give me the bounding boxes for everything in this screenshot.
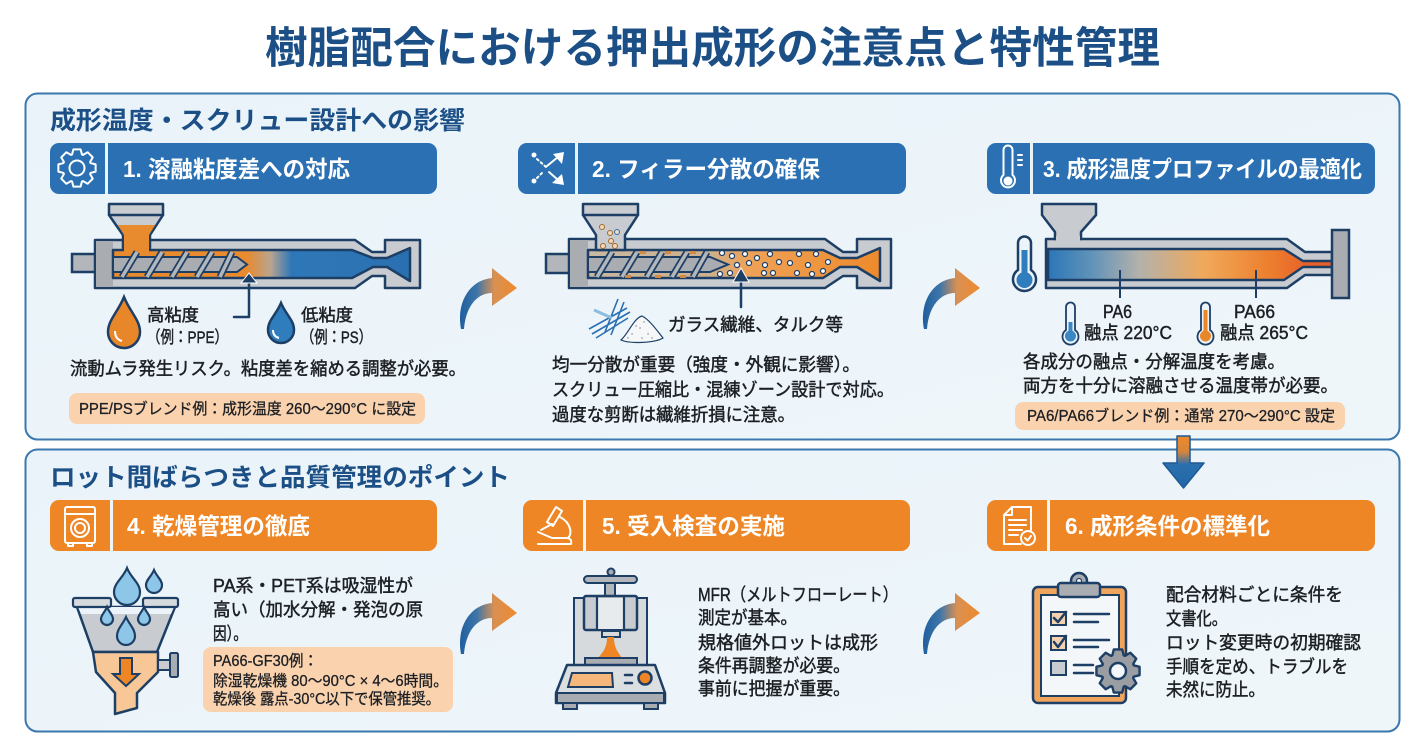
header: step 6: 6. 成形条件の標準化 [1065, 513, 1270, 539]
label: high viscosity: 高粘度 [147, 306, 199, 325]
text: step 6 description: 配合材料ごとに条件を [1166, 585, 1343, 605]
text: step 3 description [1023, 352, 1338, 396]
icon: large thermometer [1013, 237, 1036, 291]
label: PA6 melting point: PA6 [1103, 302, 1132, 322]
text: step 6 description: 手順を定め、トラブルを [1166, 656, 1348, 677]
text: step 3 description: 両方を十分に溶融させる温度帯が必要。 [1023, 376, 1338, 396]
text: step 2 description: 過度な剪断は繊維折損に注意。 [552, 405, 795, 425]
text: step 6 description: 文書化。 [1166, 609, 1227, 629]
callout: PA66-GF30 example: 乾燥後 露点-30°C以下で保管推奨。 [213, 690, 440, 708]
text: step 2 description: スクリュー圧縮比・混練ゾーン設計で対応。 [552, 380, 894, 400]
header: step 2 [518, 143, 906, 194]
diagram: extruder with filler [546, 204, 891, 288]
label: PA66 melting point: PA66 [1234, 302, 1275, 322]
label: high viscosity [147, 306, 228, 347]
arrow: step 1 to 2 [460, 268, 517, 329]
label: low viscosity: （例：PS） [301, 328, 372, 347]
text: step 2 description: 均一分散が重要（強度・外観に影響）。 [552, 355, 860, 375]
text: step 3 description: 各成分の融点・分解温度を考慮。 [1023, 352, 1285, 372]
label: PA66 melting point [1220, 302, 1308, 343]
header: step 5: 5. 受入検査の実施 [602, 513, 785, 539]
label: high viscosity: （例：PPE） [147, 328, 228, 347]
arrow: filler pointer [733, 268, 749, 307]
callout: PPE/PS example [69, 393, 425, 424]
heading: section 2: ロット間ばらつきと品質管理のポイント [50, 464, 510, 492]
arrow: step 2 to 3 [923, 268, 980, 329]
icon: clipboard and gear [1033, 573, 1140, 703]
icon: PA66 thermometer [1198, 302, 1214, 345]
diagram: barrel temperature profile [1042, 204, 1349, 298]
text: step 4 description: PA系・PET系は吸湿性が [213, 576, 413, 596]
arrow: section 1 to section 2 [1163, 436, 1204, 488]
text: step 6 description: ロット変更時の初期確認 [1166, 633, 1361, 653]
icon: glass fibers and talc [589, 299, 663, 342]
panel: lot variation and quality control [26, 450, 1400, 732]
text: step 5 description: MFR（メルトフローレート） [698, 585, 898, 605]
text: step 5 description: 条件再調整が必要。 [698, 656, 850, 676]
icon: MFR tester [556, 568, 665, 709]
text: step 4 description: 因）。 [213, 624, 247, 644]
header: step 6 [987, 500, 1375, 551]
text: step 5 description: 事前に把握が重要。 [698, 679, 850, 699]
callout: PA66-GF30 example [203, 647, 453, 712]
label: PA6 melting point [1084, 302, 1172, 343]
text: step 4 description: 高い（加水分解・発泡の原 [213, 600, 423, 620]
panel: molding temperature and screw design [26, 94, 1400, 440]
label: low viscosity: 低粘度 [301, 306, 353, 325]
arrow: step 4 to 5 [460, 593, 517, 654]
icon: PA6 thermometer [1062, 302, 1078, 345]
callout: PA6/PA66 example [1015, 402, 1345, 430]
icon: microscope [538, 507, 571, 544]
text: step 5 description: 測定が基本。 [698, 608, 797, 628]
header: step 3 [987, 143, 1375, 194]
icon: blue drop [268, 303, 294, 343]
label: filler types: ガラス繊維、タルク等 [668, 315, 843, 335]
icon: orange drop [108, 297, 140, 348]
header: step 2: 2. フィラー分散の確保 [592, 156, 820, 182]
icon: dryer [65, 507, 95, 546]
text: step 6 description [1166, 585, 1361, 700]
callout: PA66-GF30 example: 除湿乾燥機 80〜90°C × 4〜6時間。 [213, 672, 448, 690]
label: PA66 melting point: 融点 265°C [1220, 323, 1308, 343]
diagram: extruder with viscosity difference [72, 204, 420, 288]
text: step 5 description: 規格値外ロットは成形 [698, 633, 878, 653]
icon: dispersion arrows [532, 152, 564, 185]
text: step 1 description: 流動ムラ発生リスク。粘度差を縮める調整が必要。 [70, 359, 466, 379]
callout: PA66-GF30 example: PA66-GF30例： [213, 652, 318, 670]
icon: drying hopper [73, 568, 178, 714]
text: step 2 description [552, 355, 894, 425]
header: step 1: 1. 溶融粘度差への対応 [123, 156, 350, 182]
label: PA6 melting point: 融点 220°C [1084, 323, 1172, 343]
arrow: step 5 to 6 [923, 593, 980, 654]
heading: section 1: 成形温度・スクリュー設計への影響 [50, 107, 465, 135]
header: step 4 [50, 500, 437, 551]
header: step 4: 4. 乾燥管理の徹底 [127, 513, 310, 539]
icon: document check [1004, 507, 1035, 545]
title: 樹脂配合における押出成形の注意点と特性管理 [265, 25, 1160, 73]
callout: PA6/PA66 example: PA6/PA66ブレンド例：通常 270〜290°C 設定 [1027, 406, 1335, 425]
text: step 6 description: 未然に防止。 [1166, 680, 1265, 700]
callout: PPE/PS example: PPE/PSブレンド例：成形温度 260〜290°C に設定 [79, 399, 416, 418]
icon: gear [58, 149, 96, 187]
arrow: viscosity pointer [234, 273, 257, 317]
text: step 5 description [698, 585, 898, 699]
header: step 1 [50, 143, 437, 194]
icon: thermometer [1001, 146, 1022, 187]
header: step 5 [523, 500, 910, 551]
label: low viscosity [301, 306, 372, 347]
header: step 3: 3. 成形温度プロファイルの最適化 [1043, 156, 1362, 182]
text: step 4 description [213, 576, 423, 644]
